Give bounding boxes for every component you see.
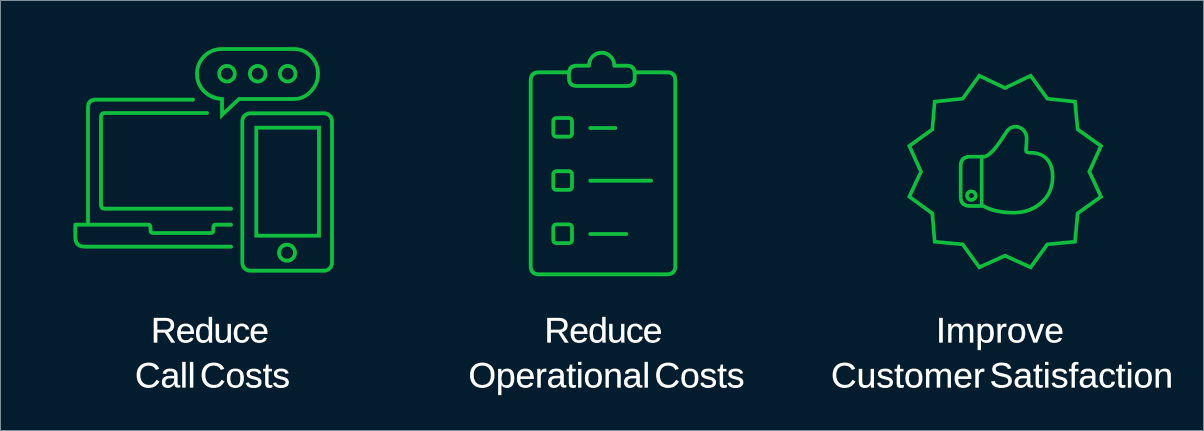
icon: speech bubble: [197, 49, 318, 115]
icon: thumbs up badge: [909, 76, 1101, 267]
starburst badge: [909, 76, 1101, 267]
label: improve customer satisfaction: Improve: [936, 310, 1064, 350]
icon: laptop: [75, 100, 231, 247]
clipboard board and clip: [531, 53, 675, 274]
icon: clipboard checklist: [531, 53, 675, 274]
label: reduce operational costs: Operational Costs: [468, 355, 744, 395]
panel: improve customer satisfaction: [831, 76, 1173, 395]
label: reduce call costs: Reduce: [151, 310, 269, 350]
label: improve customer satisfaction: Customer Satisfaction: [831, 355, 1173, 395]
panel: reduce call costs: [75, 49, 332, 395]
panel: reduce operational costs: [468, 53, 744, 395]
checklist items: [553, 118, 651, 243]
icon: smartphone: [242, 113, 332, 271]
icon: laptop, phone and speech bubble: [75, 49, 332, 271]
label: reduce call costs: Call Costs: [135, 355, 290, 395]
label: reduce operational costs: Reduce: [544, 310, 662, 350]
thumbs up: [961, 127, 1053, 213]
